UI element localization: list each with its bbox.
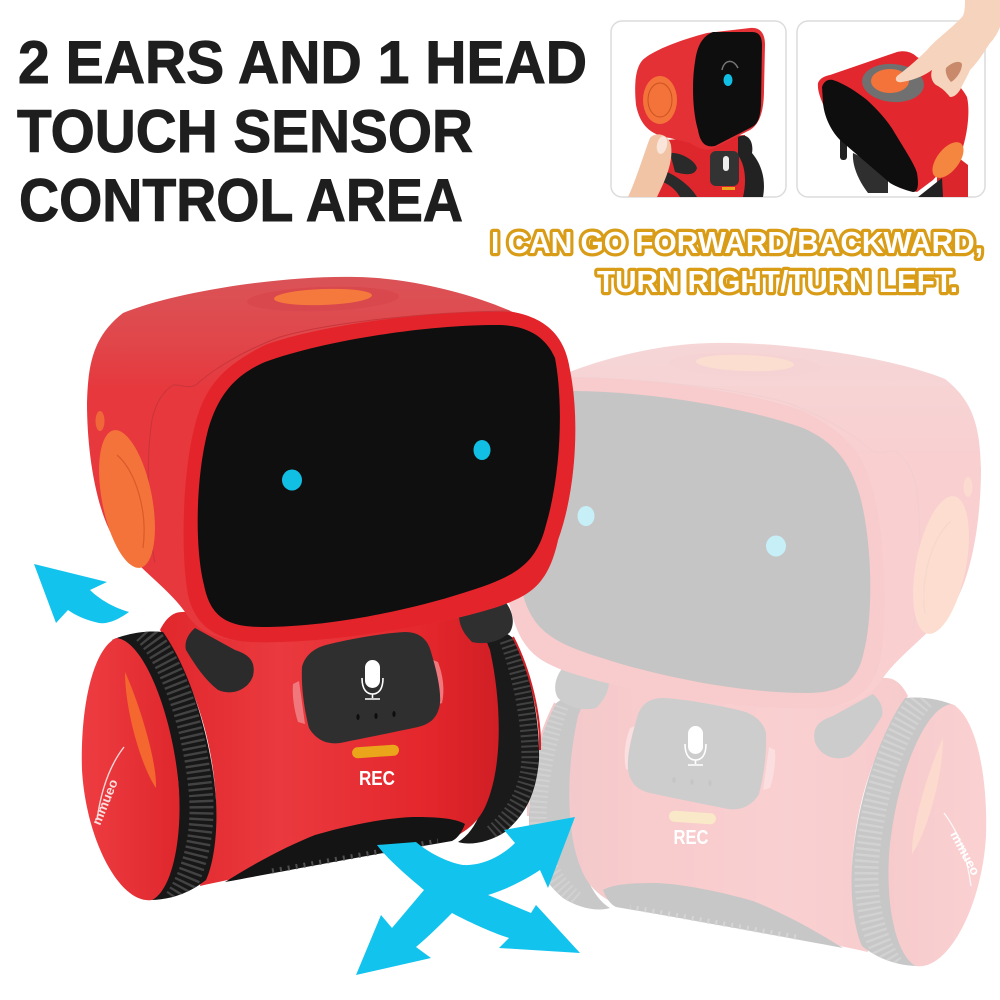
yellow REC light [352, 744, 399, 759]
right wheel [458, 631, 540, 844]
thumb inner screen [822, 80, 918, 192]
thumb lower wheel [937, 160, 968, 197]
top touch sensor ring [247, 284, 399, 314]
left eye [282, 470, 302, 490]
faded mirrored robot [493, 343, 986, 966]
thumb screen [693, 32, 762, 146]
small ear dot [96, 411, 104, 431]
panel side lights [293, 660, 443, 724]
arrows: crossing movement [356, 817, 580, 975]
thumb sensor [871, 69, 909, 93]
title [17, 29, 587, 234]
thumb panel [710, 151, 739, 186]
left wheel tread [112, 631, 216, 900]
thumb lower tread [918, 178, 943, 197]
face rim [184, 312, 575, 642]
thumb right tread [738, 136, 764, 197]
microphone icon [362, 660, 383, 699]
body [160, 600, 499, 886]
bottom black skirt [225, 817, 465, 882]
movement caption [491, 225, 983, 299]
main wheel logo: mmueo [89, 777, 121, 827]
thumb sensor ring [862, 64, 924, 102]
thumb side ear [932, 142, 964, 178]
thumb dark panel [853, 153, 888, 193]
faded wheel logo: mmueo [947, 828, 983, 878]
main robot REC label: REC [359, 768, 395, 790]
side ear sensor [89, 426, 165, 572]
title line 3: CONTROL AREA [19, 167, 463, 234]
thumb dark arm [840, 138, 847, 160]
thumb finger [628, 134, 671, 197]
thumbnail: side ear touch [611, 21, 786, 197]
thumb nail [656, 136, 668, 154]
thumb left arm and tread [663, 153, 697, 197]
thumb head [635, 28, 765, 149]
wheel orange slit [125, 672, 156, 788]
thumb eye [724, 74, 732, 86]
hand shadow between fingers [946, 62, 962, 82]
head shell [87, 277, 575, 642]
right eye [474, 440, 490, 460]
arrow: upper left [34, 564, 129, 623]
left wheel face [82, 638, 180, 900]
main robot [82, 277, 575, 900]
thumb brow [722, 61, 738, 70]
screen [198, 325, 560, 627]
thumb ear [643, 76, 677, 124]
caption line 1: I CAN GO FORWARD/BACKWARD, [491, 225, 983, 260]
title line 2: TOUCH SENSOR [17, 98, 473, 165]
top touch sensor [274, 287, 372, 307]
hand [896, 0, 1000, 97]
head seam [148, 311, 510, 563]
thumb ear ring [648, 83, 672, 117]
panel dots [356, 711, 396, 720]
thumb mic [723, 156, 729, 171]
wheel swoosh [97, 747, 124, 820]
caption line 2: TURN RIGHT/TURN LEFT. [597, 264, 958, 299]
faded robot REC label: REC [674, 827, 708, 849]
thumb body [655, 135, 752, 197]
title line 1: 2 EARS AND 1 HEAD [18, 29, 587, 96]
left arm [185, 628, 254, 692]
right arm [459, 598, 513, 643]
microphone panel [302, 632, 440, 743]
thumbnail: top head touch [797, 0, 1000, 197]
thumb yellow light [722, 187, 735, 190]
thumb head shell [818, 51, 968, 192]
